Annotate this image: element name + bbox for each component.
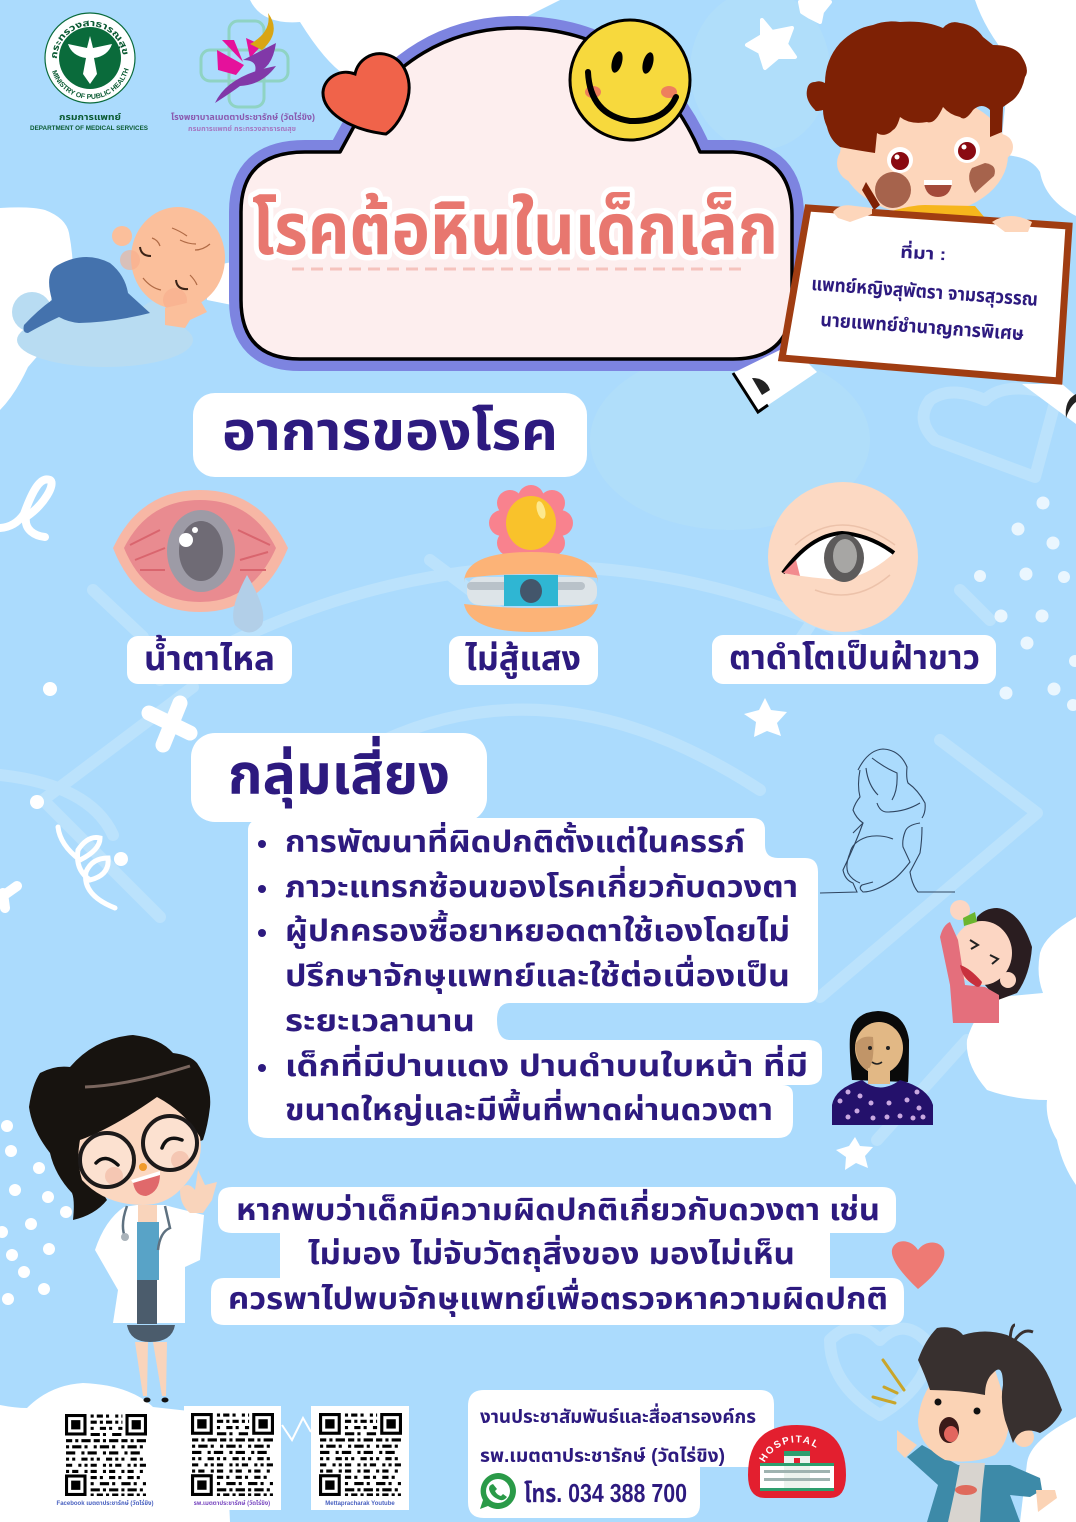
- head: [918, 1370, 1009, 1462]
- source text: ที่มา :: [900, 240, 947, 264]
- contact box: รพ.เมตตาประชารักษ์ (วัดไร่ขิง): [480, 1445, 725, 1467]
- source text: นายแพทย์ชำนาญการพิเศษ: [820, 310, 1025, 345]
- icon: smiley: [570, 20, 690, 140]
- label: tearing: [127, 634, 292, 684]
- hair: [807, 21, 1027, 153]
- icon: hospital badge: [748, 1425, 846, 1498]
- title text: โรคต้อหินในเด็กเล็ก: [252, 190, 778, 270]
- bullet text lines: การพัฒนาที่ผิดปกติตั้งแต่ในครรภ์: [285, 820, 745, 859]
- risk group list panel: [248, 818, 822, 1138]
- contact box: งานประชาสัมพันธ์และสื่อสารองค์กร: [480, 1403, 756, 1428]
- baby sleeping on cloud: [12, 207, 225, 367]
- label: light sensitivity: ไม่สู้แสง: [465, 640, 581, 679]
- icon: child using eye drops: [940, 900, 1032, 1023]
- title card: [241, 28, 792, 359]
- bullet text lines: ระยะเวลานาน: [285, 1005, 475, 1038]
- source text: [811, 240, 1039, 345]
- QR code: website: [184, 1406, 281, 1510]
- doctor character: [29, 1035, 217, 1402]
- source text: แพทย์หญิงสุพัตรา จามรสุวรรณ: [811, 274, 1039, 311]
- QR code: Facebook: [57, 1416, 153, 1507]
- bullet text lines: [258, 820, 808, 1127]
- icon: clouded pupil eye: [768, 482, 918, 632]
- icon: whatsapp: [480, 1473, 516, 1509]
- face: [840, 95, 1008, 215]
- logo: Ministry of Public Health: DEPARTMENT OF MEDICAL SERVICES: [30, 126, 148, 132]
- QR code: YouTube: Mettapracharak Youtube: [325, 1501, 395, 1507]
- advice message panel: หากพบว่าเด็กมีความผิดปกติเกี่ยวกับดวงตา เช่น: [236, 1188, 880, 1227]
- hair: [918, 1327, 1062, 1443]
- jacket: [907, 1445, 1042, 1522]
- bullet text lines: ผู้ปกครองซื้อยาหยอดตาใช้เองโดยไม่: [285, 909, 790, 949]
- QR code: website: รพ.เมตตาประชารักษ์ (วัดไร่ขิง): [194, 1499, 270, 1507]
- icon: light sensitive eye: [464, 485, 598, 632]
- advice message panel: [211, 1187, 904, 1325]
- icon: heart: [323, 54, 409, 134]
- icon: watery red eye: [113, 490, 288, 632]
- logo: Metta Pracharak Hospital: กรมการแพทย์ กระทรวงสาธารณสุข: [188, 125, 296, 134]
- label: tearing: น้ำตาไหล: [144, 634, 275, 678]
- heading: symptoms: [193, 393, 587, 477]
- logo: Ministry of Public Health: [30, 12, 148, 132]
- QR code: YouTube: [311, 1406, 409, 1510]
- bullet text lines: ภาวะแทรกซ้อนของโรคเกี่ยวกับดวงตา: [285, 865, 798, 904]
- white coat: [95, 1205, 204, 1323]
- contact box: [468, 1390, 774, 1518]
- label: enlarged cloudy cornea: [712, 635, 996, 684]
- QR code: Facebook: Facebook เมตตาประชารักษ์ (วัดไร่ขิง): [57, 1499, 153, 1507]
- boy holding source sign: [733, 21, 1076, 418]
- logo: Metta Pracharak Hospital: โรงพยาบาลเมตตาประชารักษ์ (วัดไร่ขิง): [171, 111, 315, 122]
- face: [78, 1097, 201, 1205]
- sign board: [782, 208, 1069, 381]
- logo: Ministry of Public Health: MINISTRY OF PUBLIC HEALTH: [52, 68, 129, 99]
- label: light sensitivity: [449, 636, 598, 685]
- bullet text lines: ปรึกษาจักษุแพทย์และใช้ต่อเนื่องเป็น: [285, 954, 790, 994]
- bullet text lines: ขนาดใหญ่และมีพื้นที่พาดผ่านดวงตา: [285, 1088, 773, 1127]
- logo: Ministry of Public Health: กรมการแพทย์: [59, 112, 121, 122]
- logo: Ministry of Public Health: กระทรวงสาธารณสุข: [52, 20, 128, 58]
- bullet text lines: เด็กที่มีปานแดง ปานดำบนใบหน้า ที่มี: [285, 1044, 808, 1083]
- heading: risk groups: กลุ่มเสี่ยง: [228, 735, 450, 809]
- advice message panel: ควรพาไปพบจักษุแพทย์เพื่อตรวจหาความผิดปกติ: [228, 1277, 888, 1317]
- label: enlarged cloudy cornea: ตาดำโตเป็นฝ้าขาว: [729, 639, 980, 677]
- hair: [29, 1035, 210, 1220]
- advice message panel: ไม่มอง ไม่จับวัตถุสิ่งของ มองไม่เห็น: [308, 1234, 795, 1272]
- logo: Metta Pracharak Hospital: [171, 13, 315, 134]
- icon: mother with facial birthmark: [832, 1011, 933, 1125]
- heading: symptoms: อาการของโรค: [222, 402, 558, 462]
- heading: risk groups: [191, 733, 487, 822]
- icon: hospital badge: HOSPITAL: [759, 1435, 816, 1462]
- icon: pregnant woman line art: [820, 749, 955, 893]
- surprised boy pointing: [873, 1325, 1062, 1522]
- contact box: โทร. 034 388 700: [524, 1478, 687, 1508]
